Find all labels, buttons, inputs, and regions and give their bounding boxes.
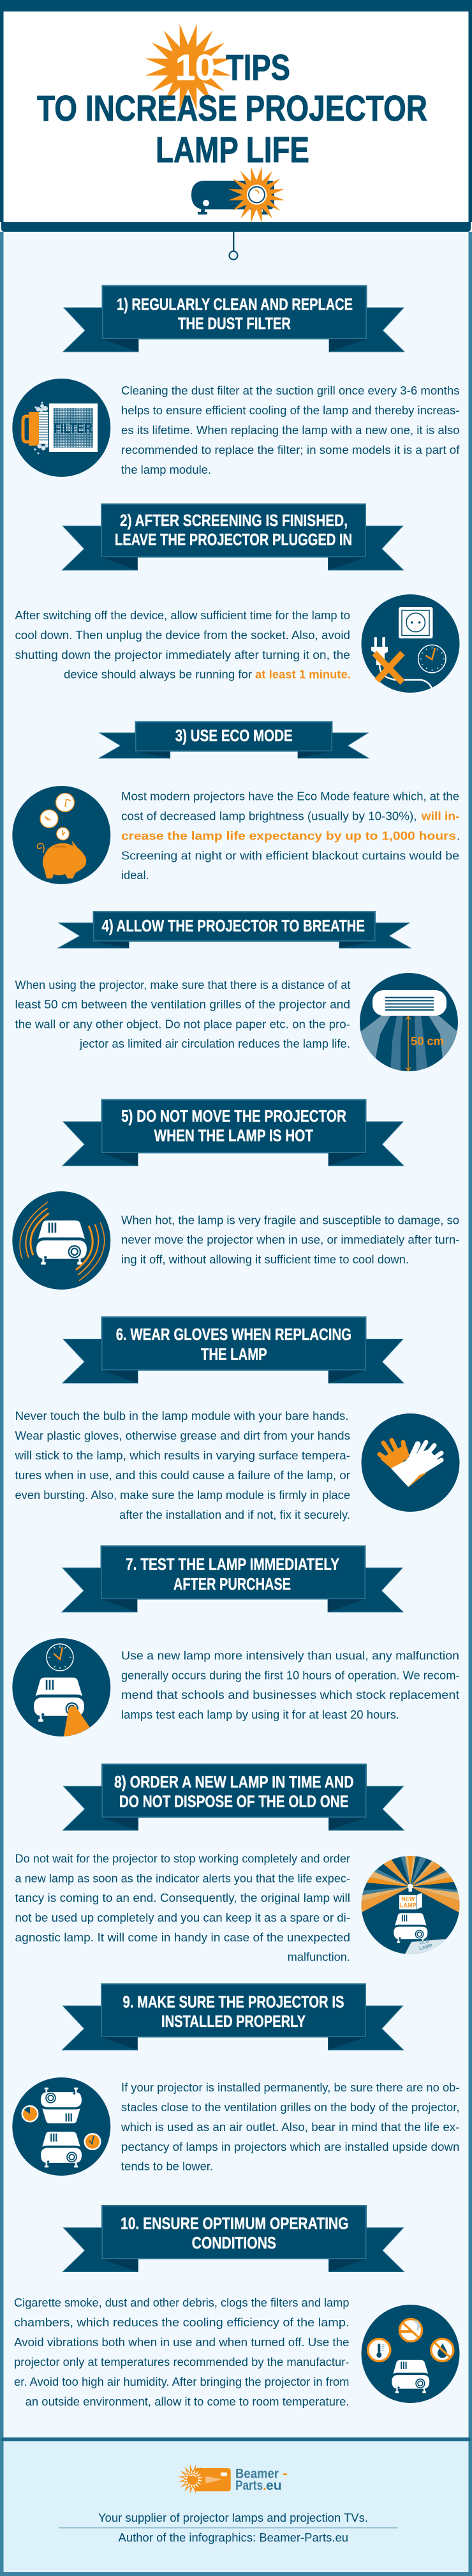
text: tip 8: Do not wait for the projector to stop working completely and order: [15, 1853, 350, 1865]
text: tip 9: which is used as an air outlet. Also, bear in mind that the life ex-: [121, 2121, 459, 2134]
text: tip 5: never move the projector when in use, or immediately after turn-: [121, 1233, 459, 1246]
banner: tip 9 heading: 9. MAKE SURE THE PROJECTOR IS: [122, 1993, 344, 2011]
text: tip 1: es its lifetime. When replacing the lamp with a new one, it is also: [121, 424, 459, 437]
banner: tip 4 heading: [58, 912, 411, 948]
icon: orange starburst behind the number: [145, 24, 232, 110]
title: LAMP LIFE: [156, 130, 309, 170]
text: tip 4: jector as limited air circulation reduces the lamp life.: [79, 1037, 350, 1050]
banner: tip 1 heading: 1) REGULARLY CLEAN AND REPLACE: [117, 296, 353, 314]
banner: tip 1 heading: THE DUST FILTER: [178, 315, 291, 333]
logo: Beamer-Parts.eu: Parts: [235, 2478, 263, 2493]
icon: new lamp box with rays and projector: LAMP: [400, 1902, 417, 1909]
text: tip 4: least 50 cm between the ventilation grilles of the projector and: [15, 998, 350, 1011]
text: tip 1: [121, 384, 460, 476]
logo: Beamer-Parts.eu: .: [263, 2478, 267, 2493]
icon: no smoke, temperature, no humidity, projector: [361, 2305, 459, 2403]
text: tip 3: Screening at night or with efficient blackout curtains would be: [121, 849, 459, 862]
banner: tip 7 heading: 7. TEST THE LAMP IMMEDIATELY: [126, 1556, 339, 1574]
text: tip 8: malfunction.: [288, 1950, 350, 1963]
banner: tip 6 heading: [63, 1316, 404, 1383]
text: tip 10: [14, 2296, 350, 2408]
title: [37, 47, 427, 170]
icon: filter and brush: [12, 379, 110, 477]
text: tip 9: [121, 2081, 459, 2173]
banner: tip 2 heading: LEAVE THE PROJECTOR PLUGGED IN: [115, 531, 352, 549]
text: tip 10: Avoid vibrations both when in use and when turned off. Use the: [14, 2336, 350, 2349]
text: footer credits: Your supplier of projector lamps and projection TVs.: [98, 2512, 368, 2524]
text: tip 2: at least 1 minute.: [255, 668, 351, 681]
text: tip 3: ideal.: [121, 869, 149, 882]
text: tip 4: When using the projector, make sure that there is a distance of at: [15, 979, 351, 991]
text: tip 10: projector only at temperatures recommended by the manufactur-: [14, 2356, 350, 2369]
text: tip 5: [121, 1214, 459, 1266]
banner: tip 5 heading: WHEN THE LAMP IS HOT: [154, 1127, 313, 1145]
text: tip 8: tancy is coming to an end. Consequently, the original lamp will: [15, 1892, 350, 1904]
text: tip 8: [15, 1853, 350, 1963]
banner: tip 1 heading: [63, 285, 404, 352]
banner: tip 4 heading: 4) ALLOW THE PROJECTOR TO BREATHE: [102, 917, 365, 935]
text: tip 2: After switching off the device, allow sufficient time for the lamp to: [15, 609, 350, 622]
text: tip 3: [121, 790, 460, 882]
text: tip 3: cost of decreased lamp brightness (usually by 10-30%),: [121, 810, 417, 822]
logo: Beamer-Parts.eu: eu: [266, 2478, 282, 2493]
text: tip 9: If your projector is installed permanently, be sure there are no ob-: [121, 2081, 459, 2094]
text: footer credits: Author of the infographics: Beamer-Parts.eu: [119, 2531, 348, 2544]
text: tip 9: tends to be lower.: [121, 2160, 213, 2173]
text: tip 2: cool down. Then unplug the device from the socket. Also, avoid: [15, 629, 350, 642]
icon: clock and projector with orange beam: [12, 1638, 110, 1740]
icon: protective gloves: [361, 1413, 459, 1512]
header panel: projection screen: [0, 0, 472, 232]
banner: tip 7 heading: AFTER PURCHASE: [173, 1576, 291, 1593]
banner: tip 10 heading: 10. ENSURE OPTIMUM OPERATING: [121, 2215, 348, 2233]
banner: tip 10 heading: [63, 2205, 404, 2271]
text: tip 1: the lamp module.: [121, 463, 211, 476]
title: 10: [175, 47, 215, 88]
text: tip 8: agnostic lamp. It will come in handy in case of the unexpected: [15, 1931, 350, 1944]
banner: tip 9 heading: INSTALLED PROPERLY: [161, 2013, 306, 2031]
text: tip 10: chambers, which reduces the cooling efficiency of the lamp.: [14, 2316, 350, 2329]
text: tip 7: Use a new lamp more intensively than usual, any malfunction: [121, 1650, 459, 1662]
text: tip 2: [15, 609, 351, 681]
banner: tip 3 heading: [99, 721, 369, 758]
text: tip 3: Most modern projectors have the Eco Mode feature which, at the: [121, 790, 459, 803]
text: tip 9: pectancy of lamps in projectors which are installed upside down: [121, 2141, 459, 2153]
banner: tip 5 heading: 5) DO NOT MOVE THE PROJECTOR: [121, 1108, 346, 1126]
text: tip 7: lamps test each lamp by using it for at least 20 hours.: [121, 1708, 399, 1721]
icon: hot projector with heat waves: [12, 1191, 110, 1290]
icon: new lamp box with rays and projector: [361, 1856, 459, 1954]
text: tip 4: [15, 979, 351, 1050]
text: tip 3: crease the lamp life expectancy by up to 1,000 hours: [121, 830, 456, 843]
text: tip 2: device should always be running for: [64, 668, 252, 681]
banner: tip 3 heading: 3) USE ECO MODE: [175, 727, 293, 745]
text: tip 7: mend that schools and businesses which stock replacement: [121, 1689, 459, 1701]
footer panel: [0, 2437, 472, 2576]
text: tip 8: not be used up completely and you can keep it as a spare or di-: [15, 1911, 350, 1924]
banner: tip 8 heading: [63, 1764, 404, 1830]
text: tip 5: When hot, the lamp is very fragile and susceptible to damage, so: [121, 1214, 459, 1227]
banner: tip 8 heading: 8) ORDER A NEW LAMP IN TIME AND: [114, 1774, 353, 1791]
icon: new lamp box with rays and projector: NEW: [401, 1896, 415, 1902]
text: tip 4: the wall or any other object. Do not place paper etc. on the pro-: [15, 1018, 350, 1030]
icon: piggy bank and falling clocks: [12, 786, 110, 884]
banner: tip 5 heading: [63, 1099, 404, 1166]
icon: ventilation grille with 50 cm clearance: [357, 973, 461, 1073]
icon: ventilation grille with 50 cm clearance: 50 cm: [411, 1035, 444, 1048]
text: tip 6: after the installation and if not, fix it securely.: [119, 1509, 350, 1521]
text: tip 6: tures when in use, and this could cause a failure of the lamp, or: [15, 1469, 350, 1482]
icon: projector with glowing lens: [191, 167, 284, 223]
banner: tip 2 heading: 2) AFTER SCREENING IS FINISHED,: [120, 512, 348, 530]
banner: tip 6 heading: 6. WEAR GLOVES WHEN REPLACING: [116, 1326, 351, 1344]
title: TIPS: [226, 47, 290, 88]
text: tip 1: Cleaning the dust filter at the suction grill once every 3-6 months: [121, 384, 459, 397]
text: tip 6: Never touch the bulb in the lamp module with your bare hands.: [15, 1410, 348, 1422]
text: tip 6: [14, 1410, 350, 1521]
banner: tip 8 heading: DO NOT DISPOSE OF THE OLD ONE: [119, 1793, 348, 1811]
text: tip 1: helps to ensure efficient cooling of the lamp and thereby increas-: [121, 404, 459, 417]
icon: projectors upright and upside down with clocks: [12, 2077, 110, 2176]
text: tip 7: [121, 1650, 459, 1721]
text: tip 3: will in-: [421, 810, 459, 822]
text: tip 6: Wear plastic gloves, otherwise grease and dirt from your hands: [15, 1429, 350, 1442]
text: tip 2: shutting down the projector immediately after turning it on, the: [15, 649, 350, 661]
logo: Beamer-Parts.eu: Beamer: [235, 2467, 279, 2482]
banner: tip 2 heading: [63, 504, 403, 570]
text: tip 6: even bursting. Also, make sure the lamp module is firmly in place: [15, 1489, 350, 1502]
logo: Beamer-Parts.eu: [178, 2464, 288, 2494]
text: tip 10: Cigarette smoke, dust and other debris, clogs the filters and lamp: [14, 2296, 350, 2309]
icon: filter and brush: FILTER: [54, 420, 92, 436]
banner: tip 10 heading: CONDITIONS: [192, 2234, 276, 2252]
banner: tip 7 heading: [62, 1546, 403, 1612]
icon: new lamp box with rays and projector: OLD: [419, 1938, 431, 1946]
banner: tip 6 heading: THE LAMP: [201, 1346, 267, 1364]
text: tip 6: will stick to the lamp, which results in varying surface tempera-: [14, 1449, 350, 1462]
text: tip 1: recommended to replace the filter; in some models it is a part of: [121, 444, 460, 456]
screen pull cord: [230, 232, 237, 259]
text: footer credits: [59, 2512, 398, 2544]
text: tip 3: .: [457, 830, 460, 843]
text: tip 5: ing it off, without allowing it sufficient time to cool down.: [121, 1253, 409, 1266]
icon: new lamp box with rays and projector: LAMP: [418, 1943, 433, 1952]
text: tip 7: generally occurs during the first 10 hours of operation. We recom-: [121, 1669, 459, 1682]
text: tip 9: stacles close to the ventilation grilles on the body of the projector,: [121, 2101, 459, 2114]
text: tip 8: a new lamp as soon as the indicator alerts you that the life expec-: [15, 1872, 350, 1885]
text: tip 10: an outside environment, allow it to come to room temperature.: [26, 2395, 350, 2408]
banner: tip 9 heading: [63, 1984, 403, 2050]
logo: Beamer-Parts.eu: -: [283, 2467, 288, 2482]
icon: socket, plug and clock: [361, 594, 459, 693]
text: tip 10: er. Avoid too high air humidity. After bringing the projector in from: [14, 2376, 350, 2388]
